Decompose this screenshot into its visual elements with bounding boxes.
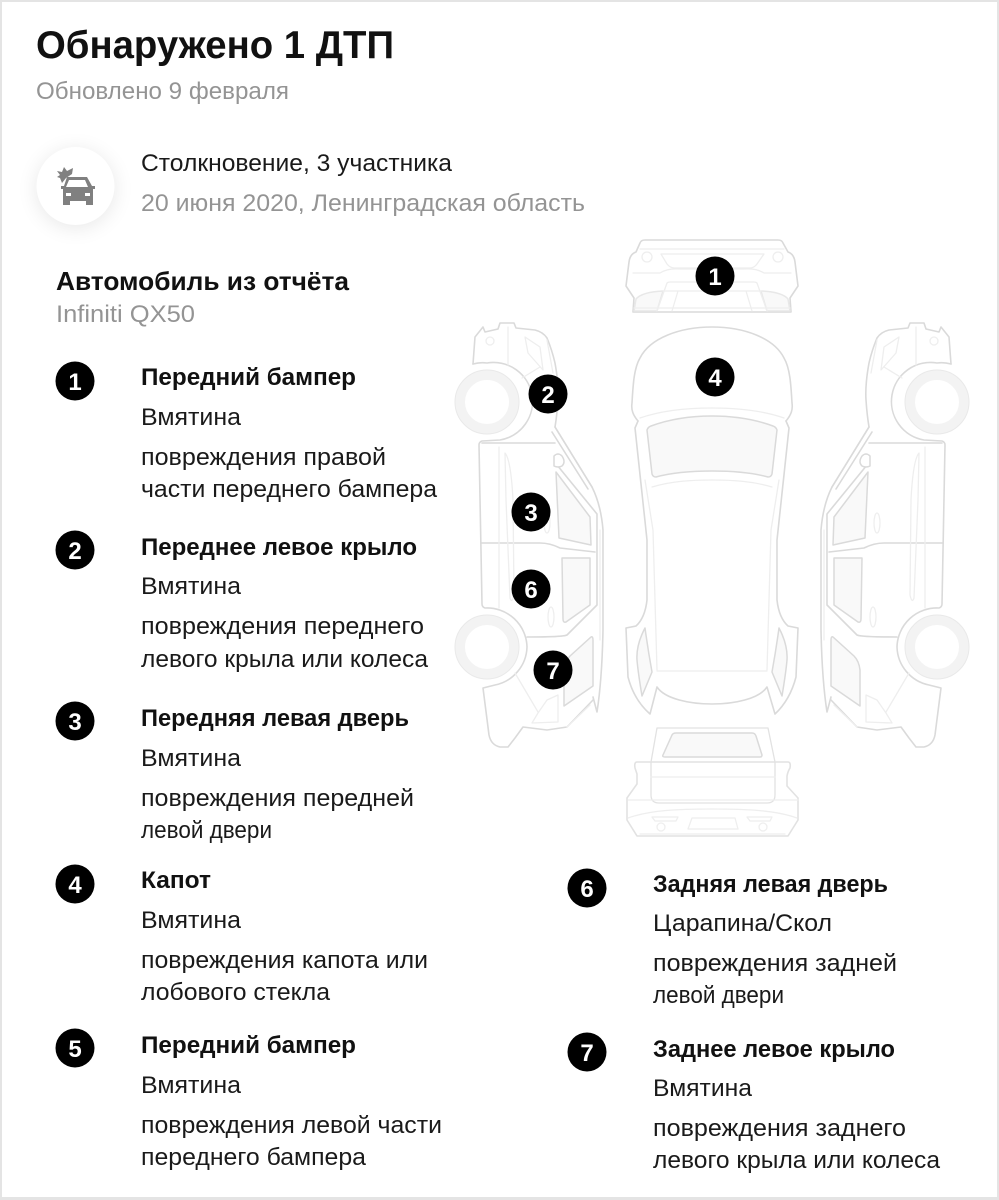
damage item 1: Вмятина: [141, 404, 242, 431]
damage item 7: 7: [580, 1040, 594, 1067]
damage item 7: повреждения заднего: [653, 1115, 906, 1142]
damage item 5: 5: [68, 1036, 82, 1063]
damage item 1: повреждения правой: [141, 444, 386, 471]
damage item 7: левого крыла или колеса: [653, 1147, 941, 1174]
damage item 4: повреждения капота или: [141, 947, 428, 974]
damage item 5: переднего бампера: [141, 1144, 367, 1171]
damage item 4: Вмятина: [141, 907, 242, 934]
car diagram: top view: [626, 327, 798, 714]
diagram marker 6: [512, 570, 550, 608]
diagram marker 3: 3: [524, 500, 538, 527]
damage item 6: левой двери: [653, 982, 784, 1009]
damage item 4: 4: [68, 872, 82, 899]
damage item 4: [56, 864, 428, 1006]
damage item 6: 6: [580, 876, 594, 903]
diagram marker 1: 1: [708, 264, 722, 291]
damage item 1: части переднего бампера: [141, 476, 438, 503]
damage item 1: [56, 362, 438, 503]
damage item 3: [56, 702, 414, 844]
damage item 5: Передний бампер: [141, 1032, 356, 1059]
damage item 5: повреждения левой части: [141, 1112, 442, 1139]
damage item 2: [56, 530, 429, 673]
diagram marker 2: 2: [541, 382, 555, 409]
title: Обнаружено 1 ДТП: [36, 24, 394, 67]
diagram marker 6: 6: [524, 577, 538, 604]
diagram marker 3: [512, 492, 550, 532]
damage item 6: Царапина/Скол: [653, 910, 832, 937]
damage item 2: левого крыла или колеса: [141, 646, 429, 673]
damage item 1: Передний бампер: [141, 364, 356, 391]
damage item 3: Передняя левая дверь: [141, 705, 409, 732]
damage item 2: 2: [68, 538, 82, 565]
damage item 4: лобового стекла: [141, 979, 331, 1006]
diagram marker 4: 4: [708, 365, 722, 392]
damage item 6: повреждения задней: [653, 950, 897, 977]
car diagram: right side view: [821, 323, 969, 747]
damage item 6: Задняя левая дверь: [653, 871, 888, 898]
car diagram: front view: [626, 240, 798, 312]
damage item 7: Вмятина: [653, 1075, 753, 1102]
diagram marker 1: [696, 256, 734, 296]
damage item 2: Переднее левое крыло: [141, 534, 417, 561]
damage item 2: Вмятина: [141, 573, 242, 600]
damage item 7: Заднее левое крыло: [653, 1036, 895, 1063]
damage item 1: 1: [68, 369, 82, 396]
damage item 4: Капот: [141, 867, 211, 894]
incident type: Столкновение, 3 участника: [141, 150, 453, 177]
incident date and place: 20 июня 2020, Ленинградская область: [141, 190, 585, 217]
damage item 7: [568, 1032, 941, 1174]
car diagram: rear view: [627, 728, 798, 836]
damage item 6: [568, 868, 897, 1009]
diagram marker 2: [528, 374, 568, 414]
diagram marker 7: 7: [546, 658, 560, 685]
vehicle model: Infiniti QX50: [56, 301, 195, 328]
damage item 5: Вмятина: [141, 1072, 242, 1099]
damage item 3: Вмятина: [141, 745, 242, 772]
car diagram: left side view: [455, 323, 603, 747]
damage item 3: 3: [68, 709, 82, 736]
section heading: Автомобиль из отчёта: [56, 266, 350, 296]
damage item 5: [56, 1028, 442, 1171]
damage item 3: повреждения передней: [141, 785, 414, 812]
diagram marker 7: [534, 650, 572, 690]
damage item 2: повреждения переднего: [141, 613, 424, 640]
icon: car collision: [36, 147, 114, 227]
updated date: Обновлено 9 февраля: [36, 78, 289, 105]
damage item 3: левой двери: [141, 817, 272, 844]
diagram marker 4: [696, 358, 734, 396]
